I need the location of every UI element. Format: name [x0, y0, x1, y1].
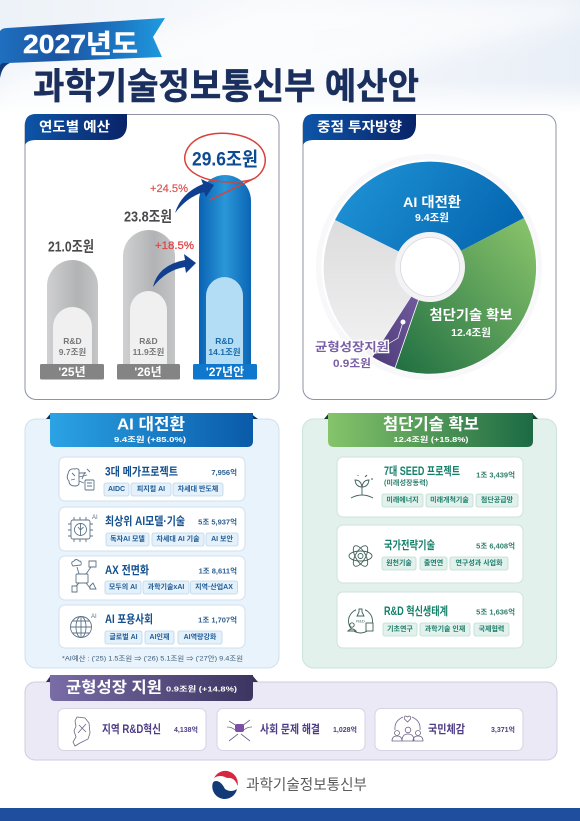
title: 지역 R&D혁신: [102, 722, 161, 736]
bar 2025: '25년: [58, 365, 86, 379]
yearly budget tab heading: 연도별 예산: [39, 120, 111, 134]
R&D mark: R&D: [356, 618, 365, 624]
red highlight ellipse: [185, 133, 265, 200]
yearly budget tab heading: [25, 114, 127, 145]
chips: 첨단공급망: [481, 495, 514, 504]
amount: 4,138억: [174, 725, 198, 734]
growth label 24.5: +24.5%: [150, 183, 188, 195]
icon: R&D cycle: [348, 607, 373, 633]
chips: [383, 623, 509, 636]
panel: advanced technology: [302, 413, 556, 668]
donut chart: 9.4조원: [415, 211, 449, 224]
AI header: AI 대전환: [117, 416, 185, 434]
chips: [106, 533, 238, 546]
amount: 3,371억: [491, 725, 515, 734]
advanced tech header: 첨단기술 확보: [383, 416, 479, 434]
chips: 차세대 AI 기술: [156, 534, 200, 543]
title: 7대 SEED 프로젝트: [384, 464, 460, 478]
ribbon year text: 2027년도: [23, 29, 138, 59]
chips: [382, 557, 508, 570]
icon: Korea map: [73, 717, 90, 746]
chips: [105, 581, 238, 594]
card: citizens: [375, 708, 523, 750]
balanced growth header: 균형성장 지원: [66, 678, 162, 696]
title: AX 전면화: [105, 563, 149, 577]
amount: 5조 5,937억: [198, 516, 237, 526]
AI header: [46, 413, 258, 447]
AI header: 9.4조원 (+85.0%): [114, 434, 187, 444]
bar 2027: '27년안: [206, 365, 244, 379]
title: R&D 혁신생태계: [384, 604, 448, 618]
bar 2025: R&D: [63, 336, 82, 346]
icon: people heart: [392, 716, 423, 741]
arrow: 2025 to 2027 total: [175, 179, 214, 213]
bar 2026: 11.9조원: [133, 347, 165, 357]
bar 2026: '26년: [134, 365, 162, 379]
chips: [104, 483, 223, 496]
card: national strategic tech: [337, 525, 523, 583]
balanced growth header: [46, 675, 258, 701]
title: 3대 메가프로젝트: [105, 464, 178, 478]
chips: 출연연: [424, 558, 443, 567]
leader dot: [388, 322, 403, 344]
balanced growth header: 0.9조원 (+14.8%): [166, 684, 238, 694]
panel: balanced growth: [25, 675, 557, 760]
chips: AI 보안: [211, 534, 233, 543]
bar 2025: [40, 238, 104, 380]
card: AI inclusive society: [59, 605, 245, 648]
amount: 7,956억: [211, 467, 237, 477]
amount: 5조 1,636억: [476, 606, 515, 616]
segment: balanced growth: [372, 267, 430, 368]
amount: 1,028억: [333, 725, 357, 734]
segment: advanced tech: [395, 218, 536, 374]
advanced tech header: 12.4조원 (+15.8%): [394, 434, 469, 444]
segment: AI: [335, 162, 524, 267]
bar 2025: 9.7조원: [59, 347, 86, 357]
footer bar: [0, 808, 580, 821]
label AI: AI 대전환: [403, 194, 461, 210]
chips: 글로벌 AI: [109, 632, 138, 641]
chips: [105, 631, 222, 644]
advanced tech header: [324, 413, 538, 447]
bar 2027: 14.1조원: [208, 347, 241, 357]
icon: hands puzzle: [227, 720, 252, 741]
AI mark: AI: [92, 515, 98, 521]
card: social problems: [217, 708, 365, 750]
title: AI 포용사회: [105, 612, 153, 626]
icon: atom: [349, 544, 372, 568]
donut chart: 12.4조원: [451, 326, 491, 339]
icon: taegeuk: [212, 771, 238, 799]
donut hub: [395, 232, 465, 302]
amount: 1조 1,707억: [198, 614, 237, 624]
AI mark: AI: [91, 614, 97, 620]
label balanced growth: 균형성장지원: [315, 339, 389, 354]
bar 2026: 23.8조원: [124, 208, 172, 226]
chips: 기초연구: [387, 624, 413, 633]
donut chart: [315, 154, 542, 380]
label advanced tech: 첨단기술 확보: [430, 307, 513, 323]
title: 최상위 AI모델·기술: [105, 514, 185, 528]
chips: 독자AI 모델: [110, 534, 145, 543]
main title: 과학기술정보통신부 예산안: [33, 66, 419, 106]
icon: AI chip: [68, 517, 93, 542]
ministry logo: [212, 771, 367, 799]
year ribbon: [0, 18, 165, 78]
chips: AIDC: [108, 486, 125, 493]
chips: 지역·산업AX: [195, 582, 233, 591]
icon: globe: [70, 616, 92, 638]
panel: investment priorities: [303, 114, 556, 400]
card: top AI models: [59, 507, 245, 551]
icon: brain chip: [67, 469, 94, 490]
chips: 과학기술xAI: [148, 582, 184, 591]
bar 2026: [117, 208, 180, 380]
growth label 18.5: +18.5%: [155, 240, 194, 252]
ministry name: 과학기술정보통신부: [246, 776, 367, 794]
bar 2027: R&D: [215, 336, 234, 346]
title: 국민체감: [428, 723, 465, 736]
priorities tab heading: 중점 투자방향: [317, 120, 402, 134]
total 2027 value: 29.6조원: [192, 148, 258, 170]
subtitle: (미래성장동력): [384, 478, 428, 487]
title: 사회 문제 해결: [260, 722, 320, 736]
card: R&D ecosystem: [337, 592, 523, 648]
chips: AI역량강화: [184, 632, 217, 641]
arrow: 2026 to 2027: [153, 254, 196, 287]
bar 2025: 21.0조원: [48, 238, 94, 256]
title: 국가전략기술: [384, 538, 435, 552]
bar 2026: R&D: [139, 336, 158, 346]
donut chart: 0.9조원: [333, 356, 371, 370]
chips: 원천기술: [386, 558, 412, 567]
chips: [382, 494, 518, 507]
card: regional R&D: [58, 708, 206, 750]
chips: 차세대 반도체: [178, 484, 218, 493]
amount: 1조 8,611억: [199, 566, 237, 576]
panel: yearly budget: [25, 114, 279, 400]
chips: 피지컬 AI: [137, 484, 165, 493]
chips: 과학기술 인재: [425, 624, 465, 633]
amount: 5조 6,408억: [476, 540, 515, 550]
priorities tab heading: [303, 114, 416, 145]
chips: 모두의 AI: [109, 582, 137, 591]
chips: AI인재: [150, 632, 169, 641]
chips: 미래개척기술: [430, 495, 469, 504]
amount: 1조 3,439억: [476, 470, 515, 480]
chips: 연구성과 사업화: [455, 558, 503, 567]
footnote: *AI예산 : ('25) 1.5조원 ⇒ ('26) 5.1조원 ⇒ ('27안) 9.4조원: [62, 654, 243, 662]
icon: network: [72, 560, 96, 592]
segment: grey remainder: [324, 220, 430, 357]
card: SEED project: [337, 457, 523, 517]
panel: AI transformation: [25, 413, 279, 668]
card: AX: [59, 556, 245, 600]
chips: 국제협력: [479, 624, 504, 633]
chips: 미래에너지: [386, 495, 419, 504]
icon: sprout: [351, 475, 373, 498]
bar 2027: [193, 175, 257, 380]
card: mega projects: [59, 457, 245, 501]
